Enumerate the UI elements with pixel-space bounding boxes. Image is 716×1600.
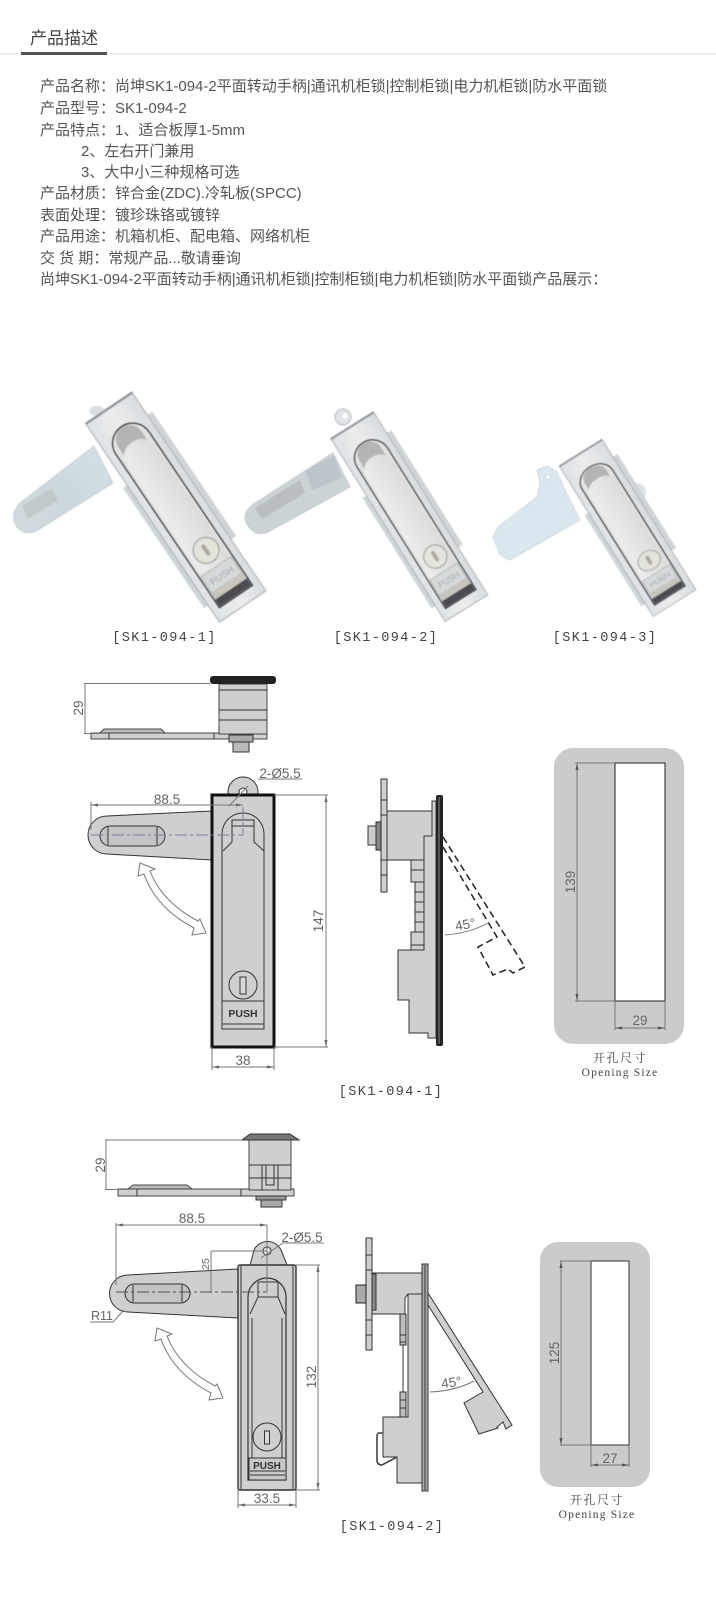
caption: SK1-094-2 drawing: [SK1-094-2] — [340, 1520, 444, 1535]
drawing: SK1-094-1 top view — [71, 676, 276, 752]
text block: product specifications: 产品名称：尚坤SK1-094-2平面转动手柄|通讯机柜锁|控制柜锁|电力机柜锁|防水平面锁 — [40, 78, 607, 94]
angle 45°: 45° — [454, 915, 477, 934]
key cylinder — [253, 1423, 281, 1451]
text block: product specifications: 交 货 期：常规产品...敬请垂询 — [40, 250, 241, 266]
drawing: SK1-094-2 top view — [93, 1134, 299, 1207]
PUSH label: PUSH — [228, 1008, 258, 1020]
photo: lock SK1-094-1 — [14, 388, 271, 625]
caption: opening size 1: 开孔尺寸 — [593, 1050, 647, 1065]
photo: lock SK1-094-3 — [493, 436, 701, 619]
drawing: SK1-094-1 front view — [88, 766, 328, 1070]
caption: SK1-094-3 photo: [SK1-094-3] — [553, 631, 657, 646]
caption: SK1-094-1 photo: [SK1-094-1] — [112, 631, 217, 646]
text block: product specifications: 产品用途：机箱机柜、配电箱、网络机柜 — [40, 228, 310, 245]
heading text: 产品描述 — [30, 29, 98, 48]
heading underline — [0, 53, 716, 55]
dimension 38: 38 — [235, 1053, 251, 1068]
text block: product specifications: 产品特点：1、适合板厚1-5mm — [40, 122, 245, 138]
text block: product specifications: 2、左右开门兼用 — [81, 142, 194, 160]
angle 45°: 45° — [440, 1374, 463, 1391]
text block: product specifications: 尚坤SK1-094-2平面转动手柄|通讯机柜锁|控制柜锁|电力机柜锁|防水平面锁产品展示： — [40, 270, 607, 288]
dimension 88.5: 88.5 — [154, 792, 180, 807]
caption: opening size 1: Opening Size — [582, 1067, 658, 1079]
text block: product specifications: 产品材质：锌合金(ZDC).冷轧板(SPCC) — [40, 185, 302, 202]
dimension 33.5: 33.5 — [254, 1491, 280, 1506]
drawing: SK1-094-2 front view — [90, 1211, 324, 1508]
dimension 132: 132 — [304, 1366, 319, 1388]
open handle dashed outline — [443, 837, 525, 975]
dimension 27: 27 — [602, 1451, 618, 1466]
text block: product specifications: 产品型号：SK1-094-2 — [40, 100, 187, 116]
text block: product specifications — [40, 78, 607, 288]
drawing: SK1-094-2 side view — [356, 1238, 512, 1491]
dimension 25: 25 — [200, 1258, 212, 1270]
rotation arrow — [155, 1328, 223, 1400]
heading: product description — [0, 29, 716, 55]
drawing: SK1-094-1 side view — [368, 779, 525, 1046]
dimension 2-Ø5.5: 2-Ø5.5 — [281, 1230, 323, 1245]
PUSH label: PUSH — [253, 1461, 281, 1472]
dimension 2-Ø5.5: 2-Ø5.5 — [259, 766, 301, 781]
caption: SK1-094-1 drawing: [SK1-094-1] — [339, 1085, 443, 1100]
caption: opening size 2 — [559, 1492, 635, 1521]
dimension 125: 125 — [547, 1342, 562, 1364]
panel: SK1-094-1 opening size — [554, 748, 684, 1044]
caption: opening size 1 — [582, 1050, 658, 1079]
dimension 29: 29 — [632, 1013, 648, 1028]
arm — [14, 446, 113, 533]
photo: lock SK1-094-2 — [245, 409, 492, 624]
wide arm — [493, 466, 580, 560]
dimension 147: 147 — [311, 910, 326, 932]
rotation arrow — [138, 863, 206, 935]
caption: opening size 2: Opening Size — [559, 1509, 635, 1521]
dimension 29: 29 — [71, 700, 86, 716]
dimension 139: 139 — [563, 871, 578, 893]
caption: SK1-094-2 photo: [SK1-094-2] — [334, 631, 438, 646]
dimension 29: 29 — [93, 1157, 108, 1173]
text block: product specifications: 表面处理：镀珍珠铬或镀锌 — [40, 206, 220, 224]
dimension 88.5: 88.5 — [179, 1211, 205, 1226]
caption: opening size 2: 开孔尺寸 — [570, 1492, 624, 1507]
text block: product specifications: 3、大中小三种规格可选 — [81, 164, 239, 181]
key cylinder — [229, 971, 257, 999]
panel: SK1-094-2 opening size — [540, 1242, 650, 1487]
arm — [245, 453, 350, 534]
open handle — [428, 1293, 512, 1434]
dimension R11: R11 — [91, 1309, 113, 1323]
